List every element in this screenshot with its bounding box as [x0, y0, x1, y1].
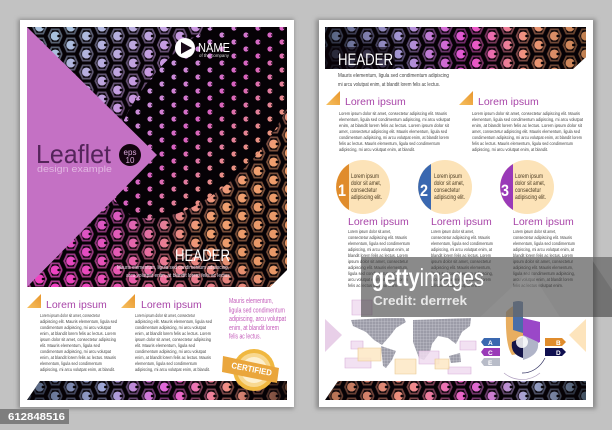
pink text block: enim, at blandit lorem	[229, 325, 279, 332]
intro text: mi arcu volutpat enim, at blandit lorem felis ac lectus.	[338, 82, 440, 88]
column text 2: consectetur adipiscing elit. Mauris	[431, 235, 490, 241]
section: upper right: adipiscing, mi arcu volutpat enim, at blandit.	[472, 147, 548, 153]
column text 2: blandit lorem felis ac lectus. Lorem	[431, 253, 491, 259]
circle callout 1: consectetur	[351, 187, 377, 194]
seal: certified: CERTIFIED	[231, 360, 273, 378]
section: upper right: enim, at blandit lorem felis ac lectus. Lorem ipsum dolor sit	[472, 123, 583, 129]
header title: HEADER	[338, 50, 393, 69]
section: upper right: felis ac lectus. Mauris elementum, ligula sed condimentum	[472, 141, 573, 147]
column text 1: Lorem ipsum dolor sit amet,	[348, 229, 391, 235]
section: column 2: elementum, ligula sed condimentum	[135, 361, 197, 367]
column text 1: Lorem ipsum	[348, 216, 409, 228]
column text 3: Lorem ipsum	[513, 216, 574, 228]
column text 2	[431, 216, 493, 289]
circle callout 3: adipiscing elit.	[515, 194, 546, 201]
circle callout 2: 2	[420, 181, 428, 200]
column text 1: ligula sed condimentum adipiscing,	[348, 271, 410, 277]
panel: front page	[20, 20, 294, 407]
bottom band back page	[325, 381, 586, 400]
intro text: Mauris elementum, ligula sed condimentum adipiscing	[338, 73, 449, 79]
purple triangle	[27, 27, 157, 287]
column text 1: arcu volutpat enim, at blandit lorem	[348, 277, 408, 283]
section: column 1: enim, at blandit lorem felis ac lectus. Lorem	[40, 331, 116, 337]
column text 3: elementum, ligula sed condimentum	[513, 241, 575, 247]
circle callout 2: consectetur	[434, 187, 460, 194]
section: upper left: felis ac lectus. Mauris elementum, ligula sed condimentum	[339, 141, 440, 147]
section: column 2: Lorem ipsum dolor sit amet, consectetur	[135, 313, 195, 319]
badge: eps 10	[119, 144, 141, 166]
header band	[325, 27, 586, 69]
image id label: 612848516	[8, 411, 65, 423]
column text 2: elementum, ligula sed condimentum	[431, 241, 493, 247]
section: column 2	[121, 294, 212, 373]
section: upper left: Lorem ipsum dolor sit amet, consectetur adipiscing elit. Mauris	[339, 111, 447, 117]
circle callout 3: Lorem ipsum	[515, 173, 543, 180]
logo: play icon and name	[175, 38, 230, 58]
column text 1	[348, 216, 410, 289]
section: column 1: elementum, ligula sed condimentum	[40, 361, 102, 367]
section: column 1: condimentum adipiscing, mi arcu volutpat	[40, 325, 112, 331]
section: column 2: ipsum dolor sit amet, consectetur adipiscing	[135, 337, 211, 343]
section: column 1	[27, 294, 117, 373]
bottom band front page	[27, 381, 287, 400]
circle callout 2: dolor sit amet,	[434, 180, 464, 187]
column text 2: ligula sed condimentum adipiscing,	[431, 271, 493, 277]
badge: eps 10: eps	[124, 148, 136, 157]
pink text block: felis ac lectus.	[229, 334, 261, 340]
circle callout 3: consectetur	[515, 187, 541, 194]
watermark	[361, 257, 612, 317]
column text 2: ipsum dolor sit amet, consectetur	[431, 259, 491, 265]
circle callout 2: adipiscing elit.	[434, 194, 465, 201]
section: column 2: condimentum adipiscing, mi arcu volutpat	[135, 325, 207, 331]
section: upper right: condimentum adipiscing, mi arcu volutpat enim, at blandit lorem	[472, 135, 582, 141]
column text 2: arcu volutpat enim, at blandit lorem	[431, 277, 491, 283]
section: upper left: elementum, ligula sed condimentum adipiscing, mi arcu volutpat	[339, 117, 451, 123]
column text 1: blandit lorem felis ac lectus. Lorem	[348, 253, 408, 259]
column text 3: Lorem ipsum dolor sit amet,	[513, 229, 556, 235]
chart labels: A	[488, 340, 493, 347]
world map	[345, 300, 476, 374]
cover hexagon image	[27, 27, 287, 287]
logo: play icon and name: NAME	[198, 40, 230, 55]
watermark: Credit: derrrek	[373, 293, 468, 308]
section: upper left: amet, consectetur adipiscing elit. Mauris elementum, ligula sed	[339, 129, 447, 135]
section: column 1: enim, at blandit lorem felis ac lectus. Mauris	[40, 355, 116, 361]
section: column 2: enim, at blandit lorem felis ac lectus. Mauris	[135, 355, 211, 361]
cover text: Mauris elementum, ligula sed condimentum adipiscing,	[117, 265, 229, 271]
section: upper right: Lorem ipsum dolor sit amet, consectetur adipiscing elit. Mauris	[472, 111, 580, 117]
column text 1: ipsum dolor sit amet, consectetur	[348, 259, 408, 265]
column text 3: blandit lorem felis ac lectus. Lorem	[513, 253, 573, 259]
circle callout 1: 1	[338, 181, 346, 200]
section: column 2: condimentum adipiscing, mi arcu volutpat	[135, 349, 207, 355]
pink text block: adipiscing, arcu volutpat	[229, 316, 286, 323]
section: column 2: adipiscing, mi arcu volutpat enim, at blandit.	[135, 367, 210, 373]
column text 3: consectetur adipiscing elit. Mauris	[513, 235, 572, 241]
chart labels	[481, 338, 566, 367]
pink text block	[229, 298, 286, 340]
circle callout 1: dolor sit amet,	[351, 180, 381, 187]
3D pie chart	[504, 301, 545, 380]
section: column 1: adipiscing, mi arcu volutpat enim, at blandit.	[40, 367, 115, 373]
column text 3: adipiscing, mi arcu volutpat enim, at	[513, 247, 575, 253]
arrow: left lilac	[325, 319, 342, 352]
circle callout 3: dolor sit amet,	[515, 180, 545, 187]
column text 1: felis ac lectus volutpat enim.	[348, 283, 398, 289]
section: upper left: condimentum adipiscing, mi arcu volutpat enim, at blandit lorem	[339, 135, 449, 141]
column text 3: arcu volutpat enim, at blandit lorem	[513, 277, 573, 283]
column text 2: adipiscing, mi arcu volutpat enim, at	[431, 247, 493, 253]
section: upper left	[326, 91, 451, 153]
column text 2: Lorem ipsum	[431, 216, 492, 228]
section: column 2: Lorem ipsum	[141, 299, 202, 311]
badge: eps 10: 10	[126, 156, 135, 165]
section: column 1: condimentum adipiscing, mi arcu volutpat	[40, 349, 112, 355]
chart labels: E	[488, 360, 493, 367]
circle callout 2	[418, 160, 472, 214]
circle callout 3	[500, 160, 554, 214]
image id label	[0, 409, 69, 424]
pink text block: ligula sed condimentum	[229, 308, 285, 314]
arrow: right cream	[569, 319, 586, 352]
section: column 1: elit. Mauris elementum, ligula sed	[40, 343, 100, 349]
seal: certified	[222, 349, 279, 391]
logo: play icon and name: of the company	[199, 53, 230, 58]
column text 3: ipsum dolor sit amet, consectetur	[513, 259, 573, 265]
column text 2: adipiscing elit. Mauris elementum,	[431, 265, 491, 271]
cover text	[117, 265, 231, 279]
circle callout 1: adipiscing elit.	[351, 194, 382, 201]
chart labels: B	[556, 340, 561, 347]
column text 1: consectetur adipiscing elit. Mauris	[348, 235, 407, 241]
column text 1: elementum, ligula sed condimentum	[348, 241, 410, 247]
column text 3: felis ac lectus volutpat enim.	[513, 283, 563, 289]
pink text block: Mauris elementum,	[229, 298, 273, 305]
cover header: HEADER	[175, 246, 230, 265]
section: upper left: enim, at blandit lorem felis ac lectus. Lorem ipsum dolor sit	[339, 123, 450, 129]
section: upper right: elementum, ligula sed condimentum adipiscing, mi arcu volutpat	[472, 117, 584, 123]
cover text: arcu volutpat enim, at blandit lorem felis ac lectus.	[126, 273, 231, 279]
section: column 1: Lorem ipsum	[46, 299, 107, 311]
column text 3	[513, 216, 575, 289]
section: column 2: enim, at blandit lorem felis ac lectus. Lorem	[135, 331, 211, 337]
section: upper left: Lorem ipsum	[345, 96, 406, 108]
column text 3: adipiscing elit. Mauris elementum,	[513, 265, 573, 271]
circle callout 1	[336, 160, 390, 214]
column text 2: Lorem ipsum dolor sit amet,	[431, 229, 474, 235]
circle callout 1: Lorem ipsum	[351, 173, 379, 180]
circle callout 2: Lorem ipsum	[434, 173, 462, 180]
section: upper left: adipiscing, mi arcu volutpat enim, at blandit.	[339, 147, 415, 153]
column text 1: adipiscing, mi arcu volutpat enim, at	[348, 247, 410, 253]
subtitle: design example	[37, 164, 112, 175]
column text 1: adipiscing elit. Mauris elementum,	[348, 265, 408, 271]
circle callout 3: 3	[501, 181, 509, 200]
section: column 1: ipsum dolor sit amet, consectetur adipiscing	[40, 337, 116, 343]
chart labels: C	[488, 350, 493, 357]
watermark: gettyimages	[372, 264, 484, 292]
section: upper right: Lorem ipsum	[478, 96, 539, 108]
section: upper right: amet, consectetur adipiscing elit. Mauris elementum, ligula sed	[472, 129, 580, 135]
section: column 2: elit. Mauris elementum, ligula sed	[135, 343, 195, 349]
chart labels: D	[556, 350, 561, 357]
intro text	[338, 73, 449, 88]
section: column 1: adipiscing elit. Mauris elementum, ligula sed	[40, 319, 117, 325]
section: upper right	[459, 91, 584, 153]
section: column 1: Lorem ipsum dolor sit amet, consectetur	[40, 313, 100, 319]
section: column 2: adipiscing elit. Mauris elementum, ligula sed	[135, 319, 212, 325]
panel: back page	[319, 20, 593, 407]
title: Leaflet: Leaflet	[36, 139, 112, 169]
column text 2: felis ac lectus volutpat enim.	[431, 283, 481, 289]
column text 3: ligula sed condimentum adipiscing,	[513, 271, 575, 277]
